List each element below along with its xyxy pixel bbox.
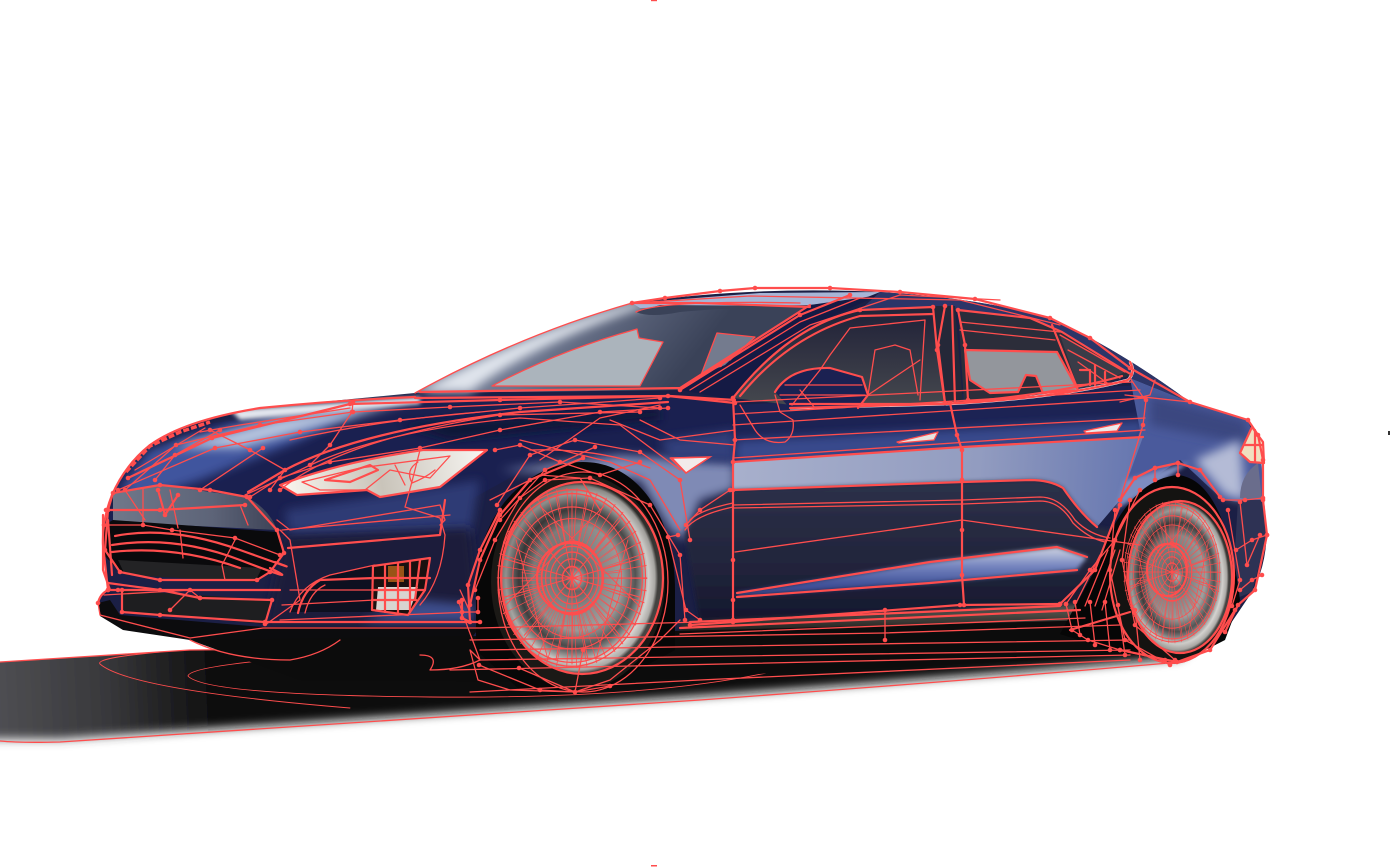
wireframe: body outline xyxy=(98,288,1267,638)
rear quarter glass xyxy=(1060,335,1125,388)
door handles xyxy=(897,423,1122,443)
wireframe: side windows xyxy=(733,306,1190,408)
wireframe: door panels xyxy=(670,382,1146,625)
grille glass xyxy=(113,485,277,530)
wireframe: hood xyxy=(118,396,735,605)
upper door colour xyxy=(735,385,1145,465)
hood and front fender colour xyxy=(100,395,735,630)
roof rear xyxy=(860,292,1190,402)
door shoulder band xyxy=(733,437,1143,527)
front bumper lip xyxy=(98,600,480,640)
sill xyxy=(678,602,1076,631)
fog light xyxy=(372,558,430,615)
wireframe: front arch and fender xyxy=(465,440,733,692)
wireframe: windshield and roof xyxy=(415,295,1060,400)
headlight xyxy=(280,450,487,497)
windshield xyxy=(415,303,810,393)
wireframe: fog light and intake xyxy=(280,510,500,622)
wireframe: rear quarter and bumper xyxy=(1120,427,1267,606)
car body paint xyxy=(90,280,1280,650)
rear wheel arch xyxy=(1060,475,1240,663)
wireframe: sill and underbody xyxy=(190,606,1130,692)
windshield top shade xyxy=(636,305,800,315)
rear upper patch xyxy=(1240,463,1262,500)
side mirror xyxy=(775,368,868,408)
lower door colour xyxy=(685,480,1115,625)
windshield passenger reflection xyxy=(701,333,755,375)
side air intake xyxy=(290,565,375,612)
registration marks xyxy=(651,0,1390,866)
front wheel arch xyxy=(476,462,675,690)
badge xyxy=(672,457,710,473)
window chrome strip xyxy=(790,362,1133,408)
A-pillar xyxy=(811,296,869,305)
ground shadow xyxy=(0,640,1200,742)
tail light xyxy=(1240,427,1264,463)
rear side window xyxy=(958,310,1132,403)
rear window reflection xyxy=(965,350,1078,393)
lower door highlight xyxy=(737,547,1087,596)
wireframe: fascia and grille xyxy=(98,485,480,625)
grille black xyxy=(104,520,284,580)
lower intake xyxy=(120,590,272,624)
wireframe: rear wheel flare xyxy=(1060,490,1235,665)
rear quarter colour xyxy=(1120,378,1264,505)
rear bumper xyxy=(1232,500,1267,600)
rear wheel xyxy=(1110,487,1234,664)
front wheel xyxy=(491,472,668,692)
grille mesh xyxy=(118,560,262,582)
B-pillar xyxy=(933,306,963,403)
underbody xyxy=(190,620,1130,682)
front side window xyxy=(733,307,945,406)
wireframe: headlight xyxy=(280,450,487,497)
windshield reflection xyxy=(492,329,663,386)
